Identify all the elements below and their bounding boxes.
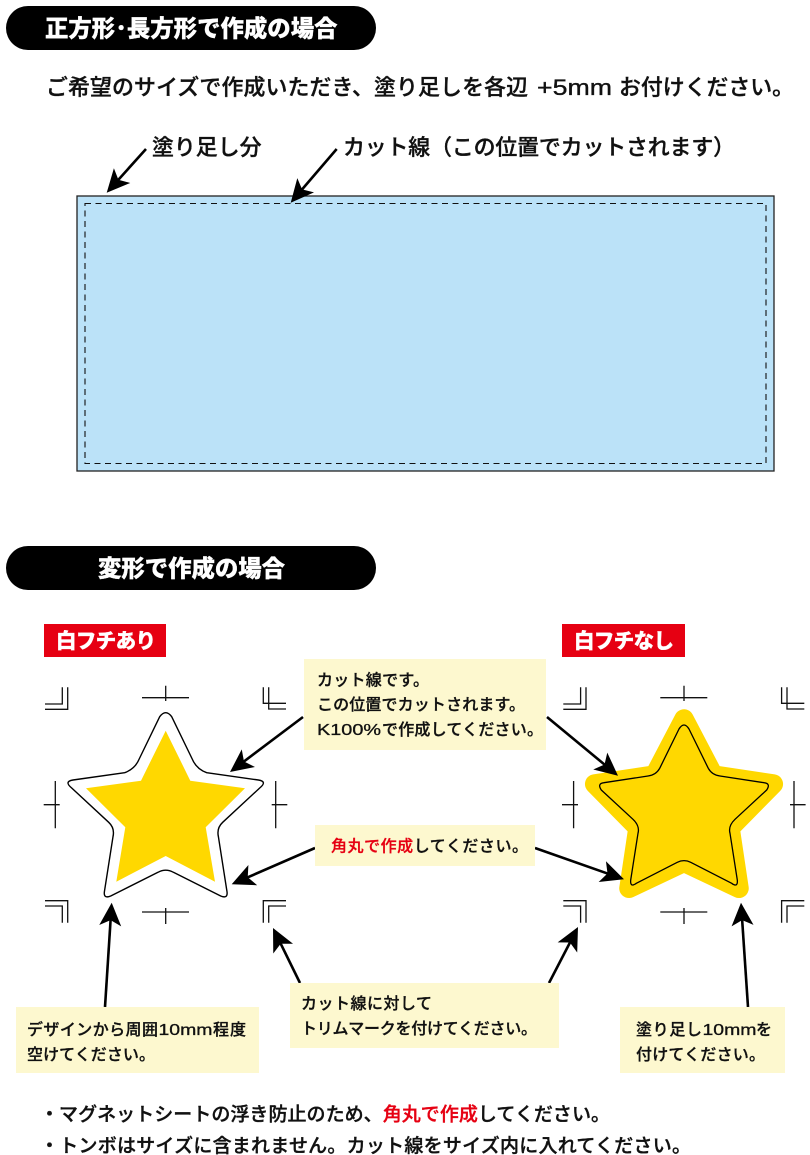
- badge: with white border: 白フチあり: [56, 629, 156, 653]
- callout: margin: [16, 1007, 259, 1073]
- note: rounded corners: ・マグネットシートの浮き防止のため、角丸で作成してください。: [40, 1104, 610, 1126]
- arrow: margin to left star: [105, 903, 112, 1007]
- badge: without white border: 白フチなし: [574, 629, 674, 653]
- star: with white border: [68, 713, 263, 897]
- intro text: [46, 75, 794, 100]
- trim marks: left star: [44, 686, 287, 924]
- callout: rounded corners: 角丸で作成してください。: [331, 838, 528, 856]
- badge: without white border: [562, 624, 685, 657]
- callout: cut line: で作成してください。: [382, 721, 543, 739]
- callout: trim marks: [290, 983, 559, 1048]
- heading: square and rectangle: 正方形･長方形で作成の場合: [45, 14, 338, 42]
- heading: irregular shape: [6, 546, 376, 590]
- callout: bleed: 付けてください。: [636, 1046, 765, 1064]
- callout: cut line: [304, 659, 546, 750]
- arrow: trim mark right: [549, 927, 578, 983]
- intro text: お付けください。: [619, 75, 794, 100]
- callout: bleed: 塗り足し: [636, 1021, 702, 1039]
- intro text: ご希望のサイズで作成いただき、塗り足しを各辺: [46, 75, 528, 100]
- arrow: rounded corner to right star: [535, 848, 624, 879]
- arrow: cut line to left star: [230, 717, 303, 772]
- arrow: rounded corner to left star: [232, 848, 315, 884]
- callout: rounded corners: [315, 825, 535, 866]
- arrow: bleed to right star: [741, 903, 748, 1007]
- arrow: trim mark left: [273, 928, 300, 983]
- callout: cut line: この位置でカットされます。: [317, 696, 525, 714]
- heading: irregular shape: 変形で作成の場合: [98, 554, 286, 582]
- callout: trim marks: トリムマークを付けてください。: [301, 1020, 537, 1038]
- callout: margin: 程度: [213, 1021, 246, 1039]
- star: without white border: [595, 719, 773, 888]
- arrow: cut line: [291, 149, 337, 203]
- arrow: cut line to right star: [547, 717, 618, 776]
- callout: trim marks: カット線に対して: [301, 995, 432, 1013]
- panel: rectangle diagram: [77, 196, 774, 471]
- heading: square and rectangle: [6, 6, 376, 50]
- badge: with white border: [44, 624, 166, 657]
- callout: bleed: [620, 1007, 785, 1073]
- callout: bleed: 10mm: [702, 1022, 756, 1039]
- trim marks: right star: [562, 686, 806, 924]
- callout: margin: 空けてください。: [27, 1046, 155, 1064]
- callout: bleed: を: [756, 1021, 772, 1039]
- label: cut line: カット線（この位置でカットされます）: [343, 135, 735, 160]
- arrow: bleed: [107, 149, 146, 193]
- callout: margin: 10mm: [158, 1022, 212, 1039]
- intro text: +5mm: [537, 75, 612, 100]
- label: bleed: 塗り足し分: [152, 135, 262, 160]
- callout: cut line: K100%: [317, 722, 381, 739]
- callout: cut line: カット線です。: [317, 672, 429, 690]
- callout: margin: デザインから周囲: [27, 1020, 158, 1039]
